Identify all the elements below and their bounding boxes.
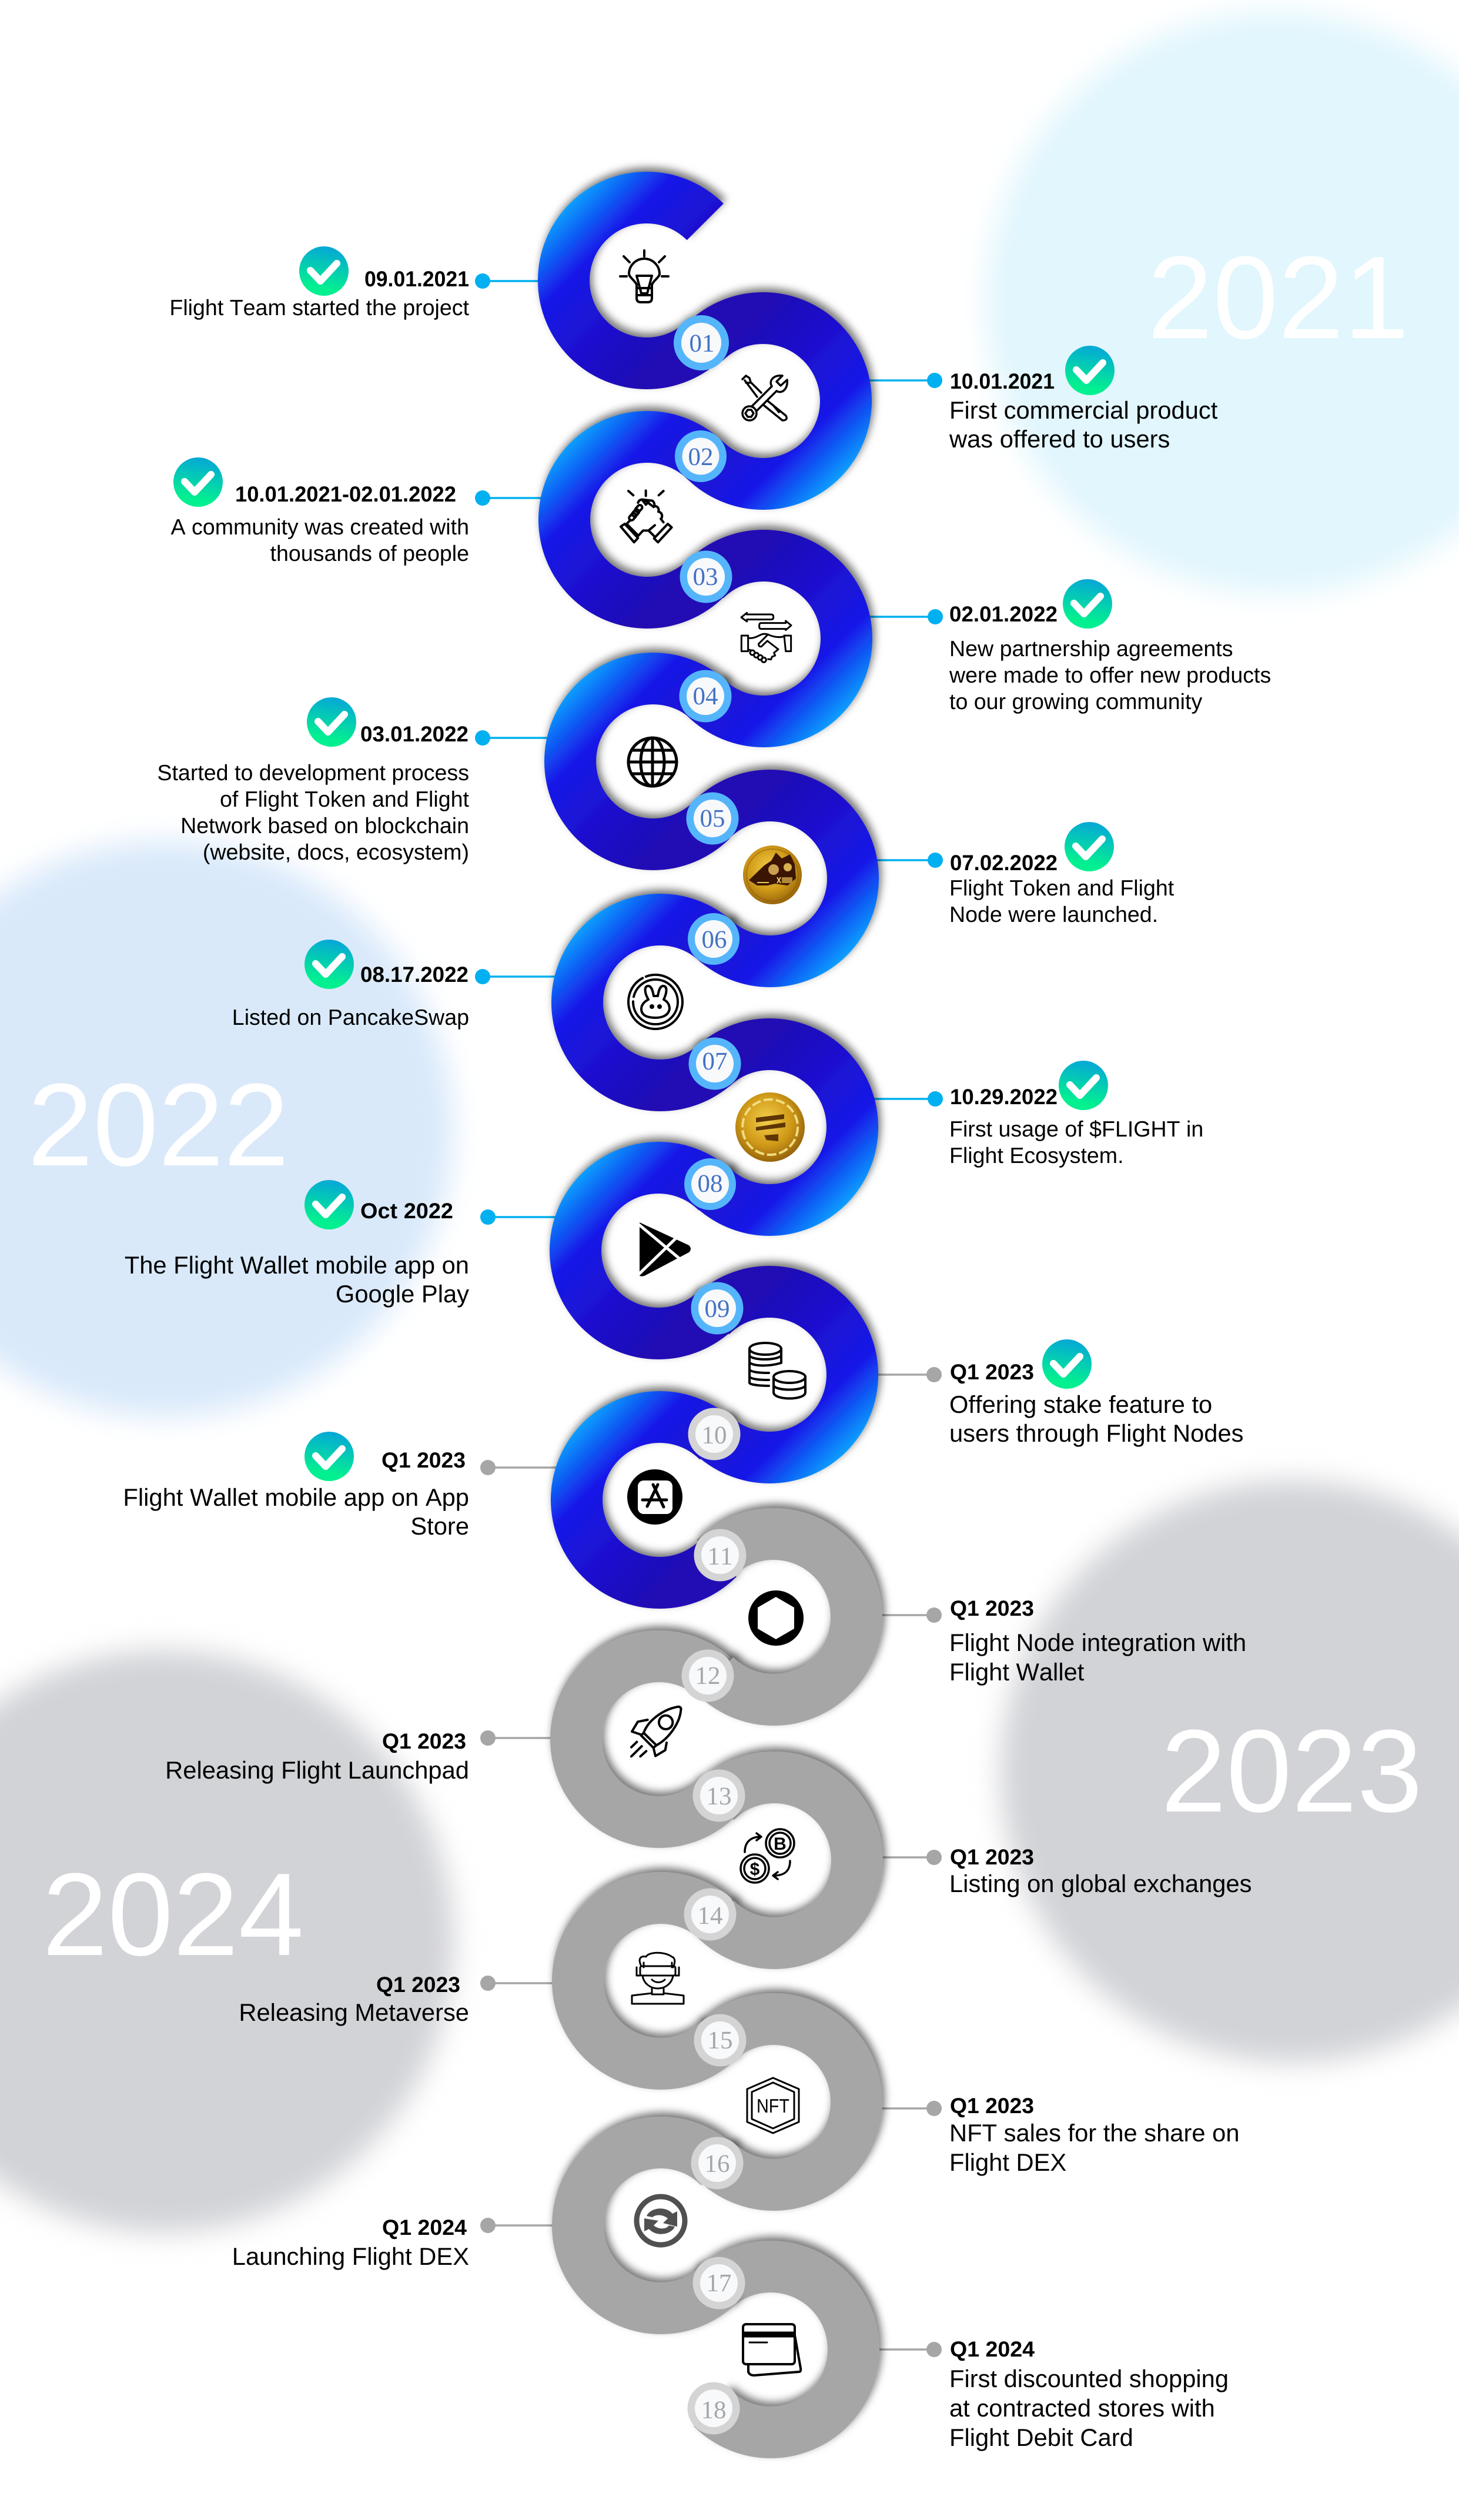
milestone 3: 10.01.2021 (950, 369, 1055, 393)
milestone 4 (949, 579, 1271, 714)
milestone 14 (949, 1845, 1252, 1897)
icon: Flight Node hexagon (748, 1590, 804, 1646)
milestone 13 (165, 1729, 469, 1784)
milestone 9: Oct 2022 (360, 1199, 453, 1223)
number badges: 16 (704, 2150, 730, 2178)
check badge (304, 940, 354, 989)
number badges: 18 (701, 2397, 727, 2424)
milestone 9: Google Play (336, 1280, 469, 1308)
milestone 7: Listed on PancakeSwap (232, 1005, 469, 1030)
icon: globe (628, 738, 677, 786)
milestone 9: The Flight Wallet mobile app on (125, 1251, 469, 1279)
milestone 4: were made to offer new products (949, 663, 1271, 687)
check badge (1065, 346, 1115, 395)
number badges (674, 315, 747, 2434)
milestone 18: at contracted stores with (949, 2394, 1215, 2422)
milestone 5: 03.01.2022 (360, 722, 469, 746)
milestone 8: Flight Ecosystem. (949, 1143, 1124, 1168)
year label: 2021: 2021 (1147, 232, 1409, 363)
number badges: 12 (695, 1662, 721, 1690)
milestone 10: Offering stake feature to (949, 1391, 1212, 1418)
milestone 4: New partnership agreements (949, 636, 1233, 661)
number badges: 01 (689, 330, 715, 357)
check badge (1065, 822, 1114, 871)
icon: gold fox coin (743, 845, 802, 904)
milestone 2 (170, 457, 469, 566)
number badges: 11 (708, 1543, 732, 1570)
check badge (1042, 1339, 1092, 1389)
check badge (1059, 1061, 1108, 1110)
icon: light bulb (620, 250, 668, 302)
milestone 15: Releasing Metaverse (239, 1998, 469, 2026)
milestone 1: 09.01.2021 (364, 267, 469, 291)
milestone 10 (949, 1339, 1244, 1447)
milestone 18: Q1 2024 (950, 2337, 1035, 2361)
milestone 6: Node were launched. (949, 902, 1158, 927)
milestone 2: 10.01.2021-02.01.2022 (235, 482, 456, 506)
year label: 2023: 2023 (1161, 1706, 1423, 1837)
icon: DEX refresh (637, 2197, 685, 2245)
milestone 5: of Flight Token and Flight (220, 787, 470, 811)
milestone 14: Q1 2023 (950, 1845, 1034, 1869)
milestone 17: Launching Flight DEX (232, 2242, 469, 2270)
milestone 5: Started to development process (157, 760, 469, 785)
number badges: 05 (700, 805, 725, 833)
number badges: 14 (697, 1902, 723, 1930)
milestone 15 (239, 1973, 469, 2026)
number badges: 07 (702, 1048, 728, 1075)
milestone 6 (949, 822, 1174, 927)
milestone 18 (949, 2337, 1229, 2451)
icon: debit cards (743, 2324, 801, 2375)
icon: rocket (631, 1707, 681, 1756)
milestone 9 (125, 1180, 469, 1308)
gray section of the track (550, 1508, 883, 2458)
milestone 16: Flight DEX (949, 2148, 1066, 2176)
milestone 17 (232, 2215, 469, 2270)
blue section of the track (538, 172, 879, 1609)
milestone 8: First usage of $FLIGHT in (949, 1117, 1203, 1141)
milestone 14: Listing on global exchanges (949, 1870, 1252, 1897)
year blob: 2024 (0, 1650, 454, 2232)
milestone 1 (169, 246, 470, 320)
milestone 11 (123, 1432, 469, 1540)
milestone 10: Q1 2023 (950, 1360, 1034, 1384)
check badge (304, 1432, 354, 1481)
milestone 18: First discounted shopping (949, 2365, 1229, 2392)
milestone 12: Flight Node integration with (949, 1629, 1246, 1656)
icon: wrench and screwdriver (742, 376, 787, 420)
milestone 5 (157, 697, 470, 864)
icon: raised clasped hands (621, 490, 672, 542)
check badge (307, 697, 356, 747)
milestone 15: Q1 2023 (376, 1973, 460, 1997)
milestone 3: was offered to users (949, 425, 1170, 453)
milestone 12 (949, 1596, 1246, 1686)
milestone 12: Flight Wallet (949, 1658, 1085, 1686)
icon: crypto exchange (741, 1829, 794, 1883)
year blob: 2021 (986, 12, 1459, 594)
connector lines and dots (475, 273, 943, 2357)
milestone 13: Releasing Flight Launchpad (165, 1756, 469, 1784)
milestone 7 (232, 940, 469, 1030)
milestone 3: First commercial product (949, 396, 1218, 424)
milestone 5: Network based on blockchain (180, 813, 469, 838)
milestone 6: Flight Token and Flight (949, 875, 1174, 900)
icon: partnership handshake (741, 613, 791, 662)
check badge (304, 1180, 354, 1229)
milestone 3 (949, 346, 1218, 453)
number badges: 10 (702, 1422, 727, 1449)
milestone 11: Flight Wallet mobile app on App (123, 1483, 469, 1511)
year blob: 2022 (0, 841, 453, 1417)
icon: crypto exchange: $ (750, 1860, 760, 1879)
milestone 8: 10.29.2022 (950, 1085, 1058, 1109)
milestone 8 (949, 1061, 1203, 1168)
check badge (173, 457, 223, 507)
milestone 7: 08.17.2022 (360, 962, 469, 987)
milestone 4: to our growing community (949, 689, 1202, 714)
milestone 11: Q1 2023 (382, 1448, 466, 1472)
number badges: 17 (707, 2270, 731, 2297)
milestone 4: 02.01.2022 (949, 602, 1058, 626)
number badges: 06 (702, 926, 727, 954)
milestone 16: NFT sales for the share on (949, 2119, 1240, 2147)
number badges: 02 (688, 443, 714, 471)
milestone 10: users through Flight Nodes (949, 1419, 1244, 1447)
milestone 12: Q1 2023 (950, 1596, 1034, 1620)
icon: Google Play (638, 1222, 691, 1276)
check badge (1063, 579, 1112, 629)
check badge (299, 246, 349, 296)
number badges: 13 (707, 1783, 731, 1810)
icon: coin stacks (749, 1343, 805, 1398)
number badges: 15 (708, 2027, 732, 2054)
icon: NFT badge (747, 2078, 799, 2133)
number badges: 04 (692, 683, 718, 710)
icon: NFT badge: NFT (757, 2095, 789, 2117)
milestone 2: A community was created with (170, 514, 469, 539)
milestone 18: Flight Debit Card (949, 2424, 1133, 2451)
icon: crypto exchange: B (774, 1834, 787, 1854)
milestone 2: thousands of people (270, 541, 469, 566)
milestone 17: Q1 2024 (382, 2215, 467, 2240)
icon: VR headset person (632, 1953, 684, 2004)
icon: App Store (627, 1469, 682, 1525)
milestone 1: Flight Team started the project (169, 295, 470, 320)
milestone 16: Q1 2023 (950, 2094, 1034, 2118)
milestone 6: 07.02.2022 (950, 851, 1058, 875)
year label: 2024: 2024 (42, 1849, 304, 1980)
icon: PancakeSwap bunny (621, 967, 690, 1037)
milestone 5: (website, docs, ecosystem) (203, 840, 469, 864)
number badges: 03 (692, 563, 718, 591)
number badges: 08 (697, 1170, 723, 1198)
year label: 2022: 2022 (28, 1060, 289, 1191)
milestone 13: Q1 2023 (382, 1729, 466, 1753)
icon: gold flight coin (735, 1092, 805, 1162)
milestone 11: Store (410, 1512, 469, 1540)
milestone 16 (949, 2094, 1240, 2176)
serpentine timeline track (538, 172, 883, 2458)
number badges: 09 (704, 1295, 730, 1323)
year blob: 2023 (1000, 1480, 1459, 2063)
